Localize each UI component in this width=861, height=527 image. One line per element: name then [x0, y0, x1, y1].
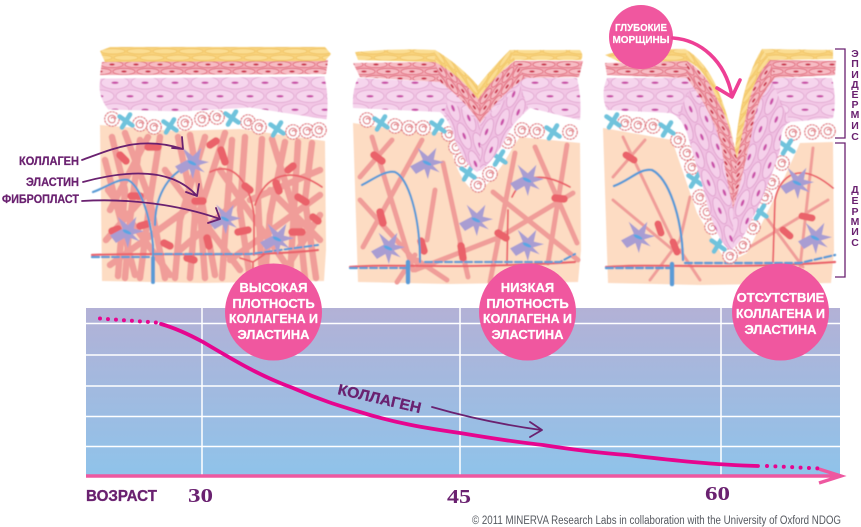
label: fibroblast: ФИБРОПЛАСТ — [2, 194, 79, 206]
chart: collagen decline by age — [86, 308, 841, 483]
arrow: fibroblast — [82, 200, 220, 223]
age axis labels — [86, 483, 730, 508]
bracket: dermis: М — [851, 216, 860, 228]
fibroblasts — [621, 168, 832, 254]
bracket: epidermis: Э — [851, 48, 859, 60]
collagen fibers — [105, 133, 320, 278]
fibroblasts — [110, 148, 294, 255]
bubble: absence: КОЛЛАГЕНА И — [736, 306, 825, 321]
fibroblasts — [371, 148, 544, 264]
arrow: elastin — [83, 174, 199, 196]
label: elastin: ЭЛАСТИН — [26, 177, 79, 189]
arrow: collagen — [82, 137, 183, 160]
elastin fibers — [350, 177, 575, 267]
arrow: to wrinkle — [673, 38, 740, 97]
basement membrane — [606, 114, 835, 263]
bubble: high density: ВЫСОКАЯ — [240, 280, 307, 295]
basement membrane — [105, 110, 326, 139]
spinous layer — [604, 78, 835, 250]
basal layer — [605, 60, 836, 208]
collagen curve label: КОЛЛАГЕН — [336, 381, 423, 417]
left labels and arrows — [2, 137, 220, 223]
bubble: absence: ЭЛАСТИНА — [744, 322, 817, 337]
bracket: epidermis — [835, 48, 860, 143]
bubble: deep wrinkles: ГЛУБОКИЕ — [615, 22, 667, 34]
dermis — [353, 123, 581, 284]
spinous layer — [353, 78, 581, 172]
elastin nodes — [626, 155, 812, 252]
blue fibers — [350, 172, 575, 282]
panel: old skin — [603, 49, 836, 285]
bubble: low density: ПЛОТНОСТЬ — [486, 296, 569, 311]
bracket: dermis: И — [851, 226, 859, 238]
bubble: low density — [479, 264, 576, 360]
panel: young skin — [92, 47, 331, 283]
basal layer — [353, 61, 583, 123]
bubble: high density: ПЛОТНОСТЬ — [232, 296, 315, 311]
bracket: epidermis: И — [851, 69, 859, 81]
bracket: epidermis: М — [851, 109, 860, 121]
bracket: dermis — [835, 143, 860, 277]
panel: middle-aged skin — [350, 49, 583, 284]
age axis labels: ВОЗРАСТ — [86, 488, 157, 505]
bracket: dermis: Р — [851, 206, 859, 218]
bubble: low density: КОЛЛАГЕНА И — [483, 311, 572, 326]
basal layer — [100, 60, 328, 75]
bubble: deep wrinkles: МОРЩИНЫ — [612, 34, 670, 46]
bubble: high density: КОЛЛАГЕНА И — [229, 311, 318, 326]
collagen fibers — [360, 137, 578, 282]
corneum — [100, 47, 331, 62]
collagen fibers — [613, 137, 828, 280]
corneum — [355, 49, 582, 99]
collagen curve — [100, 318, 820, 468]
collagen label arrow — [432, 407, 542, 437]
bracket: epidermis: И — [851, 120, 859, 132]
dermis — [100, 125, 326, 283]
bubble: high density: ЭЛАСТИНА — [237, 327, 310, 342]
elastin nodes — [374, 155, 564, 258]
bracket: dermis: Д — [851, 184, 859, 196]
spinous layer — [99, 76, 328, 120]
elastin nodes — [112, 141, 318, 260]
bracket: dermis: С — [851, 237, 859, 249]
bubble: deep wrinkles — [609, 5, 673, 69]
age axis labels: 45 — [447, 486, 471, 508]
elastin fibers — [92, 169, 322, 270]
bracket: epidermis: Д — [851, 79, 859, 91]
bubble: low density: НИЗКАЯ — [501, 280, 554, 295]
blue fibers — [606, 170, 835, 284]
bracket: epidermis: С — [851, 131, 859, 143]
bracket: epidermis: Е — [851, 89, 859, 101]
bubble: low density: ЭЛАСТИНА — [491, 327, 564, 342]
bracket: dermis: Е — [851, 195, 859, 207]
bubble: high density — [225, 264, 322, 360]
bracket: epidermis: Р — [851, 99, 859, 111]
dermis — [603, 128, 834, 285]
bubble: absence: ОТСУТСТВИЕ — [737, 290, 825, 305]
age axis labels: 60 — [705, 483, 730, 505]
x axis arrow — [86, 469, 841, 483]
elastin fibers — [606, 173, 835, 267]
blue fibers — [92, 165, 318, 282]
bracket: epidermis: П — [851, 58, 859, 70]
age axis labels: 30 — [188, 485, 213, 507]
basement membrane — [360, 113, 577, 192]
label: collagen: КОЛЛАГЕН — [19, 156, 79, 168]
corneum — [605, 49, 833, 158]
bubble: absence — [732, 264, 829, 360]
